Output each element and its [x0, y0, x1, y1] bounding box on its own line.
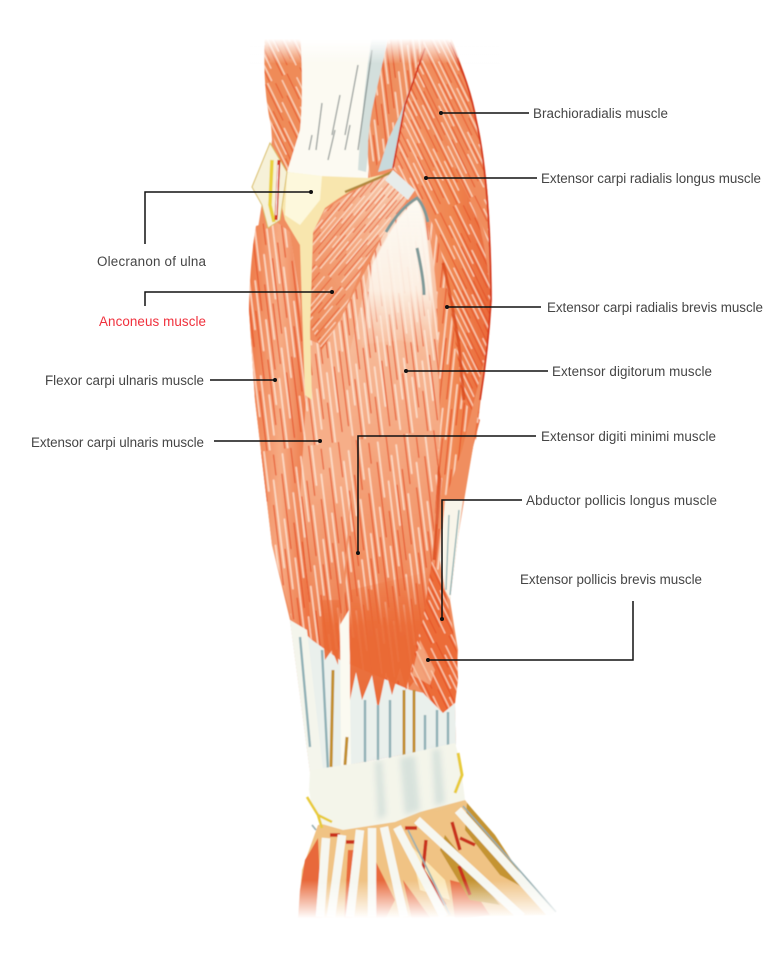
label: Olecranon of ulna: [97, 190, 313, 269]
retinaculum shading: [375, 748, 445, 820]
tendon: extensor digitorum septum: [362, 200, 432, 350]
tendon: central white: [340, 610, 351, 767]
tendons: tan lines: [331, 670, 414, 767]
tendon: olecranon yellow area: [278, 172, 393, 400]
muscle: brachioradialis: [406, 30, 490, 250]
label: Extensor carpi ulnaris muscle: [31, 435, 322, 450]
muscle: upper left: [264, 30, 302, 172]
yellow nerve left: [307, 797, 332, 828]
tendons: teal lines: [300, 637, 448, 770]
forearm illustration: [249, 30, 556, 920]
base silhouette of forearm: [249, 30, 491, 772]
label: Extensor digiti minimi muscle: [356, 429, 716, 555]
label: Abductor pollicis longus muscle: [440, 493, 717, 621]
label: Extensor carpi radialis brevis muscle: [445, 300, 763, 315]
label: Anconeus muscle: Anconeus muscle: [99, 314, 206, 329]
muscle: abductor and extensor pollicis: [410, 560, 458, 713]
label: Flexor carpi ulnaris muscle: [45, 373, 277, 388]
grey wedge between muscles: [378, 55, 422, 172]
yellow nerve right: [455, 753, 462, 793]
extensor retinaculum: [309, 743, 465, 830]
label: Extensor carpi ulnaris muscle: Extensor carpi ulnaris muscle: [31, 435, 204, 450]
hand: white tendons: [320, 810, 552, 917]
muscle: lower fringe: [320, 570, 436, 710]
muscle: flexor carpi ulnaris: [249, 220, 312, 640]
bone: olecranon: [252, 143, 287, 228]
label: Extensor carpi radialis brevis muscle: Extensor carpi radialis brevis muscle: [547, 300, 763, 315]
label: Anconeus muscle: [99, 290, 334, 329]
hand: red arteries: [330, 822, 475, 905]
hand: tendon shadows: [312, 806, 556, 915]
red edges: [393, 42, 491, 400]
label: Olecranon of ulna: Olecranon of ulna: [97, 254, 207, 269]
radial lower strip: [440, 345, 488, 600]
triceps grey shading: [358, 35, 388, 172]
hand: pale centre: [410, 845, 450, 900]
tendons: wrist base: [290, 620, 456, 772]
tendon junction, pale: [385, 170, 415, 200]
label: Extensor digitorum muscle: [404, 364, 712, 379]
muscle: extensor digitorum: [342, 198, 440, 700]
label: Extensor pollicis brevis muscle: [426, 572, 702, 662]
label: Brachioradialis muscle: [439, 106, 668, 121]
fade: bottom of hand: [285, 880, 565, 928]
septum grey line: [386, 198, 428, 295]
shadow where triceps meets anconeus: [345, 172, 392, 192]
label: Extensor carpi radialis longus muscle: Extensor carpi radialis longus muscle: [541, 171, 761, 186]
label: Brachioradialis muscle: Brachioradialis muscle: [533, 106, 668, 121]
muscle: anconeus: [310, 172, 415, 350]
fade: top of arm: [250, 22, 500, 64]
dark separation lines: [297, 263, 464, 610]
hand: gold region: [440, 803, 533, 905]
label: Flexor carpi ulnaris muscle: Flexor carpi ulnaris muscle: [45, 373, 204, 388]
label: Abductor pollicis longus muscle: Abductor pollicis longus muscle: [526, 493, 717, 508]
hand: orange muscles: [298, 838, 490, 920]
tendon: ulnar side: [290, 620, 323, 772]
triceps dark streaks: [309, 50, 372, 160]
label: Extensor pollicis brevis muscle: Extensor pollicis brevis muscle: [520, 572, 702, 587]
hand base: [298, 800, 550, 920]
label: Extensor digitorum muscle: Extensor digitorum muscle: [552, 364, 712, 379]
pale belly of pollicis brevis: [412, 640, 435, 685]
label: Extensor digiti minimi muscle: Extensor digiti minimi muscle: [541, 429, 716, 444]
muscle: extensor carpi radialis longus: [393, 105, 491, 440]
label: Extensor carpi radialis longus muscle: [424, 171, 761, 186]
muscle: upper middle: [368, 30, 428, 178]
muscle: extensor carpi radialis brevis: [428, 215, 480, 580]
tendon: olecranon pale centre: [285, 172, 322, 225]
muscle: extensor carpi ulnaris: [300, 258, 372, 690]
tendon: triceps: [287, 30, 390, 178]
